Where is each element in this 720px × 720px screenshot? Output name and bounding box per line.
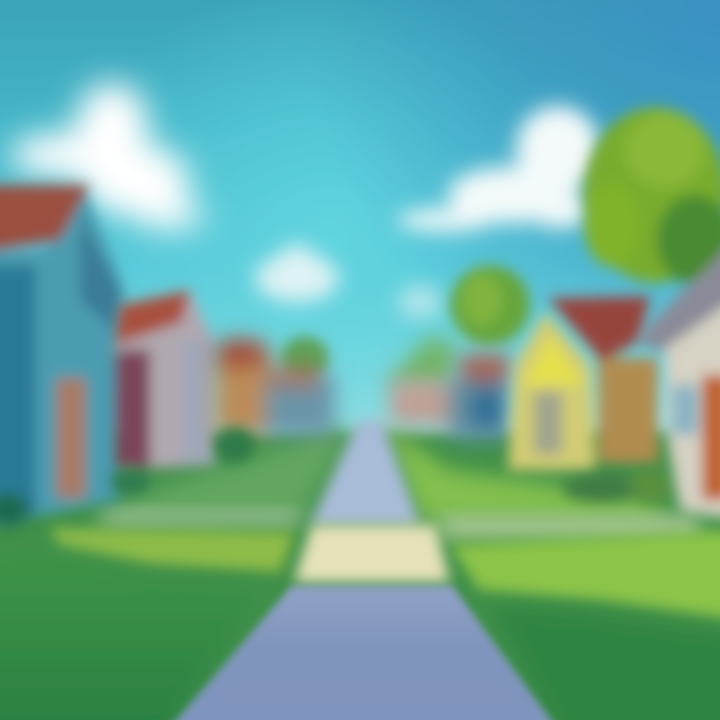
lawn: left shade <box>0 545 270 720</box>
lawn: right shade <box>490 605 720 720</box>
house: left third <box>215 338 335 435</box>
grass: base <box>0 432 720 720</box>
sky <box>0 0 720 460</box>
house: left near <box>0 185 125 525</box>
house: right yellow <box>508 296 658 470</box>
cloud: upper left <box>10 83 205 229</box>
tree: far left <box>281 336 329 380</box>
shrubs: right <box>562 468 670 504</box>
walkway: far section <box>310 420 420 525</box>
cloud: upper right <box>397 106 600 231</box>
houses: right row far <box>390 355 510 440</box>
strip: right cross walk <box>440 516 700 538</box>
tree: mid right <box>450 265 530 345</box>
house: right near <box>635 232 720 520</box>
cloud: small horizon <box>398 286 442 318</box>
shrubs: left <box>0 427 255 526</box>
lawn: left sunlit <box>50 528 295 572</box>
strip: left cross walk <box>100 510 300 526</box>
house: left second <box>115 290 215 470</box>
cloud: center <box>255 244 339 302</box>
tree: far right low <box>385 335 455 390</box>
walkway: sunlit band <box>294 525 450 582</box>
lawn: right sunlit <box>450 530 720 620</box>
walkway: near section <box>160 586 565 720</box>
grass: far lawns <box>100 425 660 525</box>
tree: large right <box>583 107 720 285</box>
